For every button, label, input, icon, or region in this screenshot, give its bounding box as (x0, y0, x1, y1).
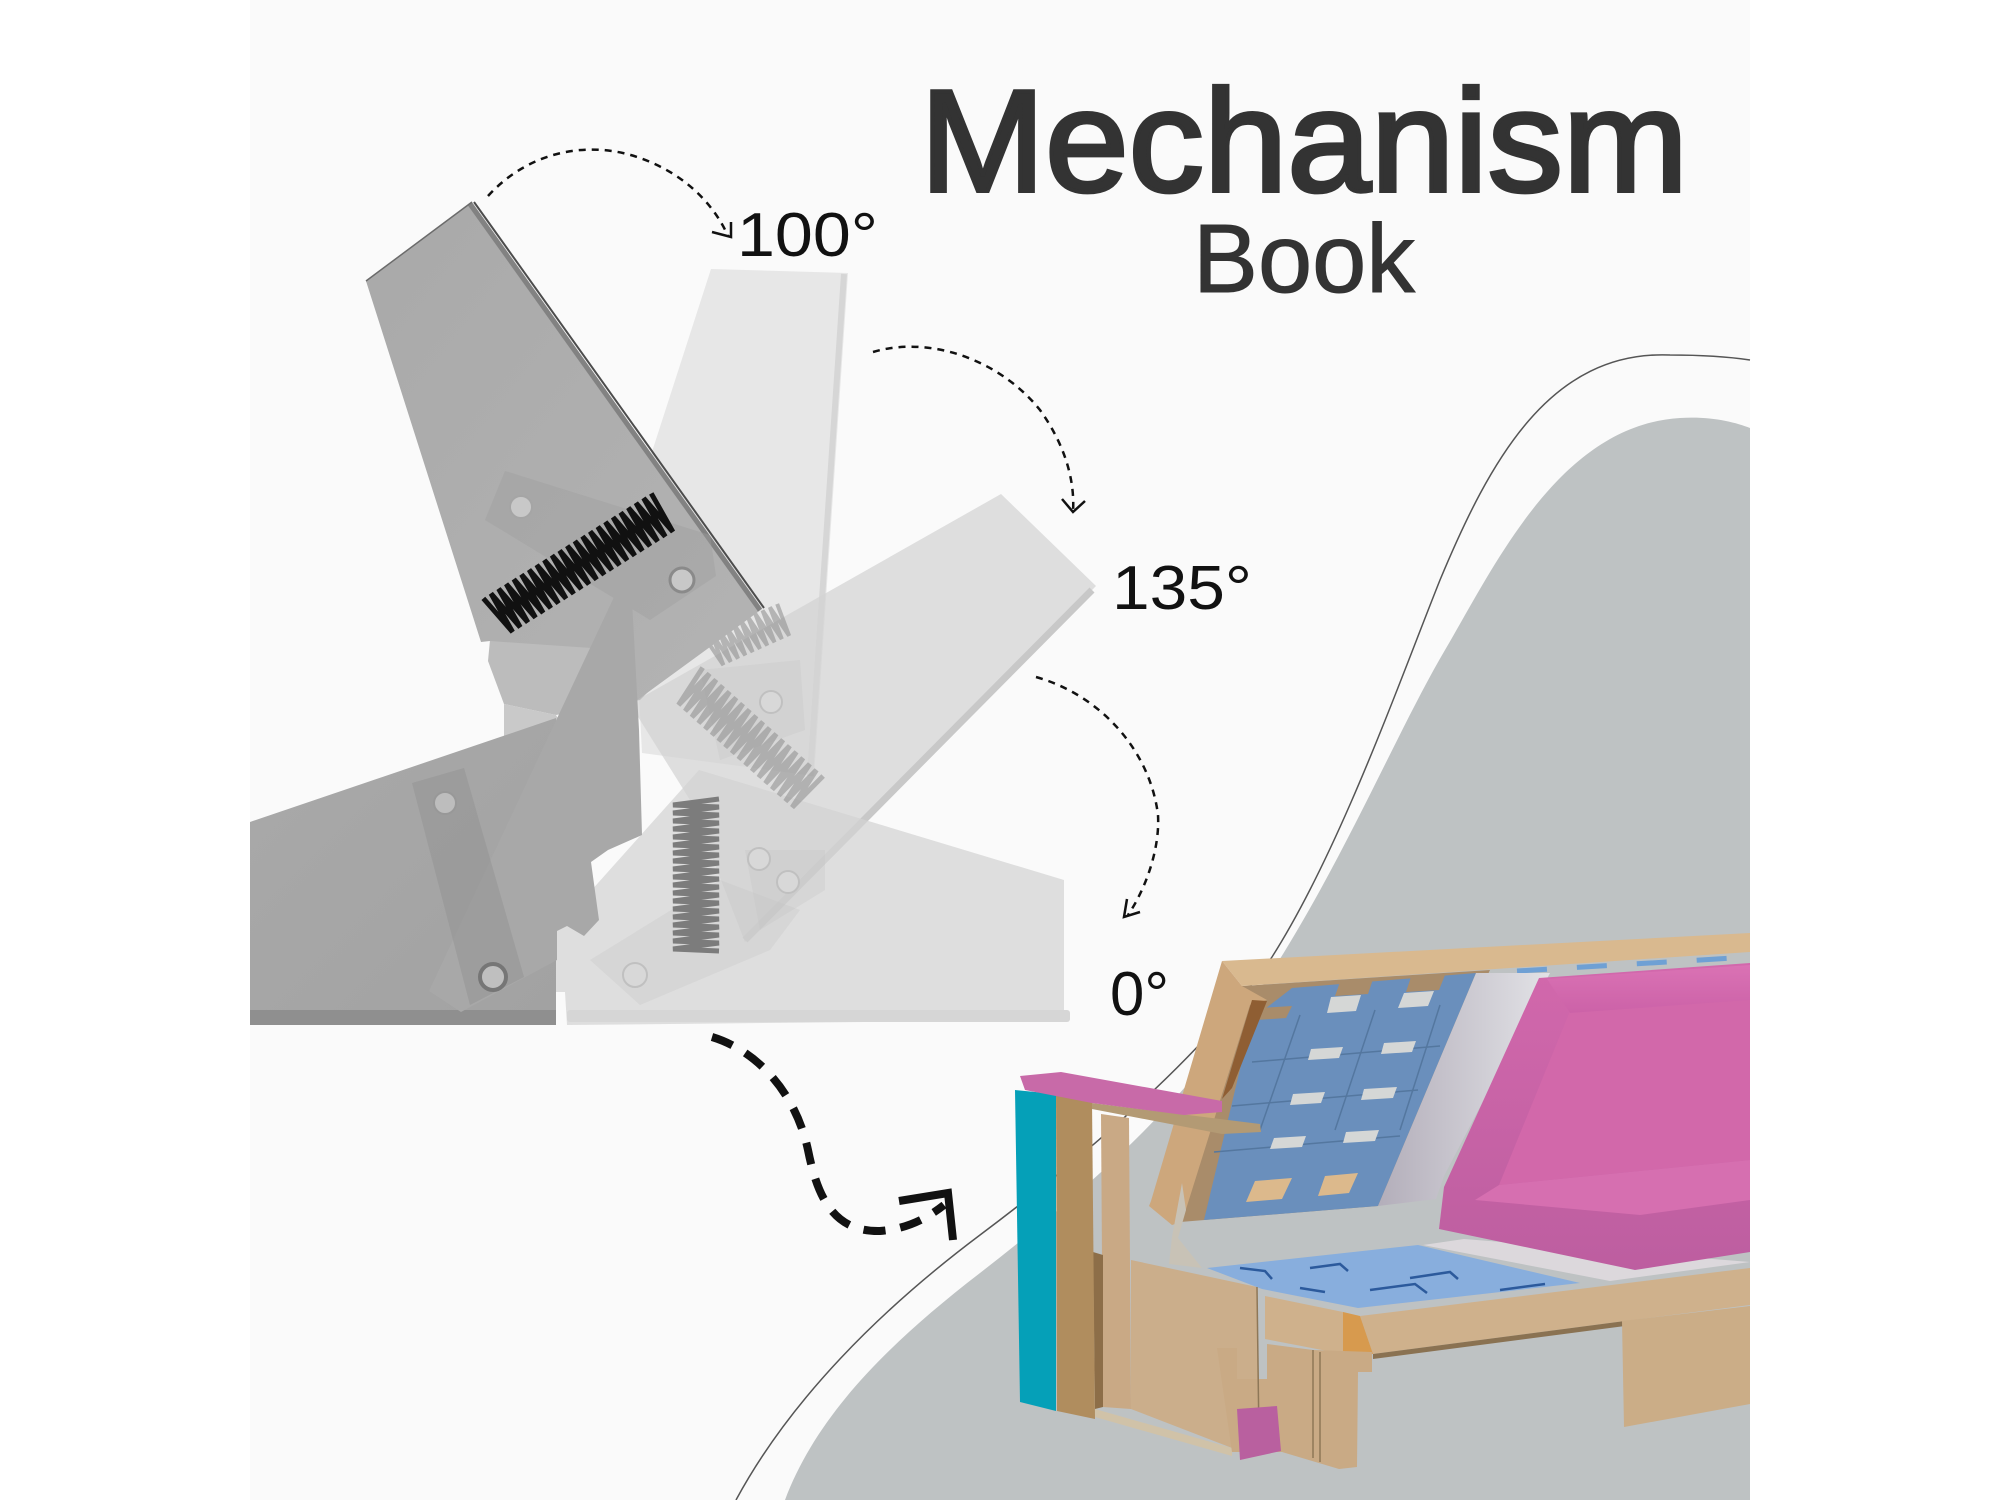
dark spring (483, 493, 675, 636)
faded strap plates (590, 660, 825, 1005)
arrow: to 100 degrees (488, 150, 731, 237)
sofa cutaway illustration (1015, 933, 1750, 1469)
hinge plate at 0 degrees, right (556, 770, 1070, 1025)
hinge mechanism illustration (250, 202, 1096, 1025)
hinge plate lower block (504, 704, 560, 740)
pink cushion top face (1547, 965, 1750, 1013)
back frame wood behind webbing (1180, 970, 1490, 1222)
hinge between back and seat (1169, 1183, 1202, 1268)
hinge plate raised position, dark (366, 202, 764, 701)
shadow under seat rail (1373, 1321, 1625, 1359)
blue seat webbing (1207, 1245, 1580, 1308)
subtitle: Book (1193, 204, 1416, 313)
seat webbing gaps (1240, 1264, 1545, 1293)
arrow: to 135 degrees (873, 347, 1085, 512)
small pink block (1237, 1406, 1281, 1460)
back left rail (1149, 961, 1267, 1225)
orange inner rail (1343, 1312, 1373, 1354)
hinge plate at 135 degrees (630, 494, 1096, 942)
strap on left plate (412, 768, 524, 1005)
wood arm (1092, 1103, 1261, 1134)
webbing wood openings (1246, 1173, 1358, 1202)
seat front rail (1360, 1268, 1750, 1354)
white seat board (1423, 1239, 1750, 1281)
faded spring, 135 degree state (673, 668, 823, 809)
blue back webbing (1204, 973, 1476, 1220)
pink cushion silhouette (1439, 963, 1750, 1270)
column edges (1257, 1287, 1320, 1462)
teal side panel (1015, 1090, 1056, 1411)
arrow: to 0 degrees (1036, 677, 1158, 917)
title: Mechanism (920, 60, 1688, 222)
dark slot in left rail (1222, 1000, 1267, 1099)
thin contour line (736, 355, 1750, 1500)
webbing weave lines (1214, 1005, 1440, 1152)
wood side panel (1056, 1092, 1095, 1419)
pink cushion back face (1499, 1000, 1750, 1185)
post (1101, 1114, 1131, 1409)
sofa leg right (1622, 1306, 1750, 1427)
arrow: mechanism to sofa (712, 1037, 953, 1240)
blue webbing edge on top rail (1517, 957, 1750, 971)
front column (1217, 1344, 1372, 1469)
dark gap beside post (1093, 1252, 1103, 1409)
webbing gaps (1270, 991, 1434, 1149)
central link arm (429, 563, 642, 1012)
pink arm pad (1020, 1072, 1222, 1115)
grey blob background (785, 418, 1750, 1500)
background panel (250, 0, 1750, 1500)
faded spring, 100 degree state (704, 604, 791, 668)
pink seat top face (1475, 1160, 1750, 1215)
hinge plate at 0 degrees, left (250, 718, 556, 1025)
lower frame strip (1095, 1409, 1232, 1456)
top webbing wood openings (1256, 975, 1445, 1020)
grey film sheet (1378, 973, 1550, 1206)
back top rail (1222, 933, 1750, 986)
faded rivets (623, 691, 799, 987)
hinge plate at 100 degrees, dark lower tail (488, 620, 700, 715)
label: 0 degrees: 0° (1110, 960, 1169, 1029)
label: 100 degrees: 100° (737, 201, 878, 270)
label: 135 degrees: 135° (1112, 554, 1252, 623)
spring, 0 degree state (673, 799, 719, 951)
hinge plate at 100 degrees (630, 269, 848, 776)
seat small rail (1265, 1296, 1343, 1354)
wood side panel inner (1131, 1260, 1260, 1448)
